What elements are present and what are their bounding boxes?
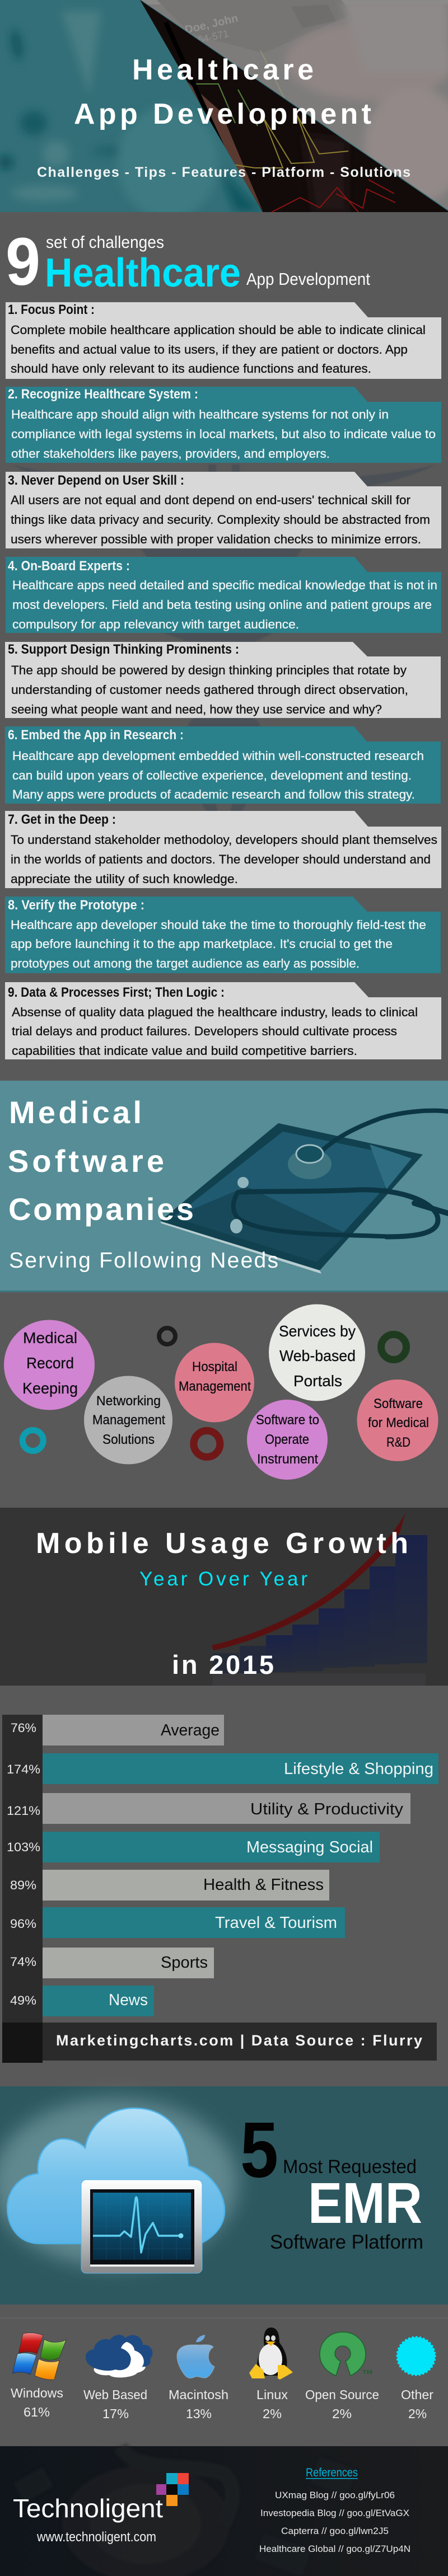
emr heading: Software Platform — [270, 2231, 423, 2253]
ring: black — [159, 1328, 175, 1344]
panel 4 body: compulsory for app relevancy with target audience. — [12, 617, 299, 631]
panel 7 body — [11, 833, 437, 886]
challenges section — [0, 212, 448, 1081]
bubble: software to operate instrument — [247, 1400, 328, 1480]
bar: travel and tourism — [10, 1907, 345, 1938]
monitor label text: 064-571 — [191, 28, 230, 47]
references list: Healthcare Global // goo.gl/Z7Up4N — [259, 2544, 410, 2554]
bubble: hospital management: Hospital — [192, 1359, 237, 1374]
hero title — [74, 54, 371, 130]
hero subtitle: Challenges - Tips - Features - Platform - Solutions — [37, 165, 410, 180]
heading: 9 set of challenges: 9 — [6, 223, 40, 299]
panel 9 body: capabilities that indicate value and build competitive barriers. — [12, 1044, 357, 1058]
platform: linux: 2% — [263, 2406, 282, 2421]
logo squares — [156, 2473, 189, 2506]
bar: sports: 74% — [10, 1955, 36, 1969]
panel 2 body: compliance with legal systems in local markets, but also to indicate value to — [11, 427, 436, 441]
bar chart image — [212, 1513, 427, 1686]
bubble: medical record keeping: Record — [26, 1354, 74, 1372]
technoligent logo — [13, 2473, 189, 2545]
panel 6: embed the app in research — [5, 726, 441, 804]
platform: other: 2% — [408, 2406, 427, 2421]
growth bar chart — [2, 1715, 438, 2063]
bar: lifestyle and shopping — [7, 1753, 438, 1784]
monitor label text — [185, 16, 238, 43]
banner heading: Medical — [9, 1095, 142, 1130]
bubble: software to operate instrument: Instrument — [257, 1452, 318, 1467]
bubble: networking management solutions: Solutions — [102, 1432, 155, 1447]
bar: utility and productivity: Utility & Productivity — [250, 1800, 404, 1818]
bar: lifestyle and shopping: Lifestyle & Shopping — [284, 1760, 433, 1778]
panel 1: focus point: 1. Focus Point : — [8, 302, 95, 317]
cloud glow — [0, 2099, 238, 2267]
panel 9 body: Absense of quality data plagued the healthcare industry, leads to clinical — [12, 1005, 418, 1019]
panel 5 body — [11, 663, 408, 716]
panel 3: never depend on user skill — [6, 472, 441, 548]
banner heading: Software — [8, 1143, 164, 1179]
mobile usage growth banner — [0, 1508, 448, 1686]
panel 5 body: understanding of customer needs gathered through direct observation, — [11, 683, 408, 697]
platform: windows: 61% — [24, 2405, 50, 2419]
panel 9 body — [12, 1005, 418, 1058]
footer stethoscope background — [13, 2447, 356, 2576]
platform: web based — [83, 2335, 152, 2421]
bar: travel and tourism: Travel & Tourism — [215, 1914, 337, 1932]
banner subheading: Year Over Year — [139, 1568, 307, 1590]
panel 2: recognize healthcare system — [6, 387, 441, 463]
bubble: medical record keeping — [4, 1320, 95, 1410]
icon: double cloud — [86, 2335, 152, 2377]
panel 8: verify the prototype — [5, 897, 441, 973]
bubble: software for medical r&d: Software — [374, 1396, 423, 1411]
bar: health and fitness: Health & Fitness — [203, 1876, 324, 1894]
bar: news — [10, 1986, 154, 2016]
bar: news: 49% — [10, 1993, 36, 2007]
panel 3: never depend on user skill: 3. Never Depend on User Skill : — [8, 473, 184, 488]
icon: penguin — [249, 2328, 293, 2380]
emr heading: EMR — [308, 2171, 422, 2235]
panel 4: on-board experts — [6, 557, 441, 633]
hero photo: monitor — [140, 0, 448, 212]
icon: open source keyhole — [320, 2332, 372, 2376]
bubble: services by web-based portals: Web-based — [279, 1347, 356, 1364]
icon: open source keyhole: TM — [362, 2369, 372, 2376]
panel 8: verify the prototype: 8. Verify the Prototype : — [8, 898, 144, 913]
ring: dark red — [194, 1430, 220, 1457]
bar: messaging social: Messaging Social — [246, 1838, 373, 1856]
heading: 9 set of challenges — [6, 223, 370, 299]
ring: teal — [22, 1430, 43, 1451]
panel 5 body: seeing what people want and need, how they use service and why? — [11, 702, 382, 716]
bar: messaging social: 103% — [7, 1840, 40, 1854]
cloud — [7, 2108, 225, 2244]
needs bubbles — [0, 1292, 448, 1508]
bar: news: News — [109, 1991, 148, 2009]
panel 5 body: The app should be powered by design thinking principles that rotate by — [11, 663, 407, 677]
heading: 9 set of challenges: set of challenges — [46, 232, 164, 252]
chart source bar — [2, 2023, 437, 2063]
panel 1 body: benefits and actual value to its users, if they are patient or doctors. App — [11, 342, 408, 356]
references list: UXmag Blog // goo.gl/fyLr06 — [275, 2490, 395, 2500]
panel 1: focus point — [6, 302, 441, 379]
panel 1 body: Complete mobile healthcare application should be able to indicate clinical — [11, 323, 426, 337]
bubble: hospital management: Management — [179, 1379, 251, 1394]
technoligent logo: www.technoligent.com — [36, 2530, 156, 2545]
bubble: services by web-based portals: Portals — [293, 1372, 342, 1390]
panel 7 body: in the worlds of patients and doctors. The developer should understand and — [11, 852, 431, 866]
platform: other — [398, 2337, 435, 2421]
panel 4 body: most developers. Field and beta testing using online and patient groups are — [12, 598, 432, 612]
hero title: Healthcare — [132, 54, 314, 86]
monitor label text: Doe, John — [184, 12, 239, 36]
references list — [259, 2490, 410, 2554]
platform: macintosh: 13% — [186, 2406, 212, 2421]
platform: macintosh: Macintosh — [169, 2387, 228, 2402]
tablet and stethoscope image — [160, 1110, 448, 1274]
bubble: services by web-based portals: Services by — [279, 1322, 356, 1340]
platform share section — [0, 2305, 448, 2446]
panel 1 body — [11, 323, 426, 376]
emr banner — [0, 2086, 448, 2305]
references list: Capterra // goo.gl/lwn2J5 — [281, 2526, 389, 2536]
panel 4: on-board experts: 4. On-Board Experts : — [8, 559, 130, 574]
platform: linux — [249, 2328, 293, 2421]
heartbeat line — [93, 2197, 181, 2253]
hero title: App Development — [74, 98, 371, 130]
icon: windows flag — [12, 2333, 66, 2380]
platform: open source: 2% — [332, 2406, 352, 2421]
rising bars — [213, 1535, 427, 1676]
bar: messaging social — [7, 1832, 380, 1862]
panel 7: get in the deep: 7. Get in the Deep : — [8, 812, 116, 827]
panel 9 body: trial delays and product failures. Developers should cultivate process — [12, 1024, 397, 1038]
panel 3 body: things like data privacy and security. Complexity should be abstracted from — [11, 513, 430, 527]
emr heading: Most Requested — [283, 2156, 417, 2178]
panel 6: embed the app in research: 6. Embed the App in Research : — [8, 728, 184, 743]
bar: sports: Sports — [161, 1954, 208, 1972]
emr heading — [240, 2105, 423, 2253]
platform: web based: Web Based — [83, 2387, 147, 2402]
banner heading: Companies — [8, 1191, 194, 1227]
footer — [0, 2446, 448, 2576]
references heading: References — [306, 2466, 358, 2479]
panel 6 body: Healthcare app development embedded within well-constructed research — [12, 749, 424, 763]
bar: utility and productivity — [7, 1793, 410, 1824]
platform: windows — [11, 2333, 66, 2419]
icon: scalloped circle — [398, 2337, 435, 2375]
panel 6 body — [12, 749, 424, 801]
chestpiece — [230, 1145, 332, 1233]
panel 3 body: All users are not equal and dont depend on end-users' technical skill for — [11, 493, 410, 507]
hero banner — [0, 0, 448, 218]
stethoscope — [234, 1110, 448, 1237]
monitor — [81, 2180, 202, 2273]
panel 3 body: users wherever possible with proper validation checks to minimize errors. — [11, 532, 421, 546]
banner heading: Mobile Usage Growth — [36, 1527, 408, 1560]
panel 4 body: Healthcare apps need detailed and specific medical knowledge that is not in — [12, 578, 437, 592]
caduceus watermark — [11, 464, 437, 823]
hero photo: teal panel — [0, 0, 448, 218]
panel 7 body: appreciate the utility of such knowledge. — [11, 872, 238, 886]
panel 5: support design thinking prominents: 5. Support Design Thinking Prominents : — [8, 642, 239, 657]
chart source bar: Marketingcharts.com | Data Source : Flurry — [56, 2032, 422, 2049]
panel 9: data and processes first — [5, 982, 441, 1059]
bar: utility and productivity: 121% — [7, 1804, 40, 1818]
platform: other: Other — [401, 2387, 433, 2402]
panel 2: recognize healthcare system: 2. Recognize Healthcare System : — [8, 387, 198, 402]
panel 8 body: prototypes out among the target audience as early as possible. — [11, 956, 360, 970]
section background — [0, 1292, 448, 1508]
panel 9: data and processes first: 9. Data & Processes First; Then Logic : — [8, 985, 225, 1000]
section background — [0, 212, 448, 1081]
growth arrow — [212, 1513, 405, 1650]
axis column — [2, 1715, 43, 2023]
technoligent logo: Technoligent — [13, 2494, 163, 2523]
panel 2 body: Healthcare app should align with healthcare systems for not only in — [11, 407, 389, 421]
panel 2 body: other stakeholders like payers, providers, and employers. — [11, 447, 330, 461]
bubble: networking management solutions — [84, 1376, 172, 1464]
panel 2 body — [11, 407, 436, 461]
platform: linux: Linux — [256, 2387, 288, 2402]
bubble: software for medical r&d — [357, 1380, 438, 1461]
panel 8 body: Healthcare app developer should take the time to thoroughly field-test the — [11, 918, 426, 932]
banner year: in 2015 — [172, 1650, 274, 1679]
bar: average — [11, 1715, 224, 1746]
bar: health and fitness: 89% — [10, 1878, 36, 1892]
bubble: software to operate instrument: Operate — [265, 1432, 309, 1447]
panel 6 body: Many apps were products of academic research and follow this strategy. — [12, 787, 415, 801]
bar reflection — [213, 1673, 426, 1686]
bubble: hospital management — [175, 1343, 254, 1423]
panel 1 body: should have only relevant to its audience functions and features. — [11, 362, 371, 376]
icon: apple — [177, 2335, 214, 2378]
panel 8 body — [11, 918, 426, 970]
banner subheading: Serving Following Needs — [9, 1249, 278, 1273]
bar: average: Average — [161, 1721, 220, 1739]
medical software banner — [0, 1081, 448, 1292]
bar: average: 76% — [11, 1721, 36, 1735]
hero photo: hand overlay: 82 — [410, 198, 430, 217]
panel 6 body: can build upon years of collective experience, development and testing. — [12, 768, 412, 782]
bubble: services by web-based portals — [269, 1304, 365, 1401]
bubble: software for medical r&d: for Medical — [368, 1415, 429, 1430]
platform: open source — [305, 2332, 379, 2421]
platform: web based: 17% — [102, 2406, 129, 2421]
emr heading: 5 — [240, 2105, 278, 2194]
references list: Investopedia Blog // goo.gl/EtVaGX — [260, 2508, 409, 2518]
references — [259, 2466, 410, 2554]
heading: 9 set of challenges: Healthcare — [45, 251, 241, 295]
bar: lifestyle and shopping: 174% — [7, 1762, 40, 1776]
bubble: medical record keeping: Keeping — [22, 1380, 78, 1397]
bubble: networking management solutions: Networking — [96, 1393, 161, 1409]
panel 8 body: app before launching it to the app marketplace. It's crucial to get the — [11, 937, 393, 951]
ring: green — [381, 1334, 407, 1360]
platform: windows: Windows — [11, 2386, 63, 2400]
panel 4 body — [12, 578, 437, 631]
platform: open source: Open Source — [305, 2387, 379, 2402]
bar: sports — [10, 1948, 214, 1978]
panel 7: get in the deep — [5, 811, 441, 888]
platform: macintosh — [169, 2335, 228, 2421]
cloud monitor icon — [7, 2108, 225, 2273]
bar: travel and tourism: 96% — [10, 1917, 36, 1931]
bubble: software for medical r&d: R&D — [386, 1435, 410, 1450]
bubble: software to operate instrument: Software to — [256, 1413, 319, 1428]
panel 5: support design thinking prominents — [5, 642, 441, 718]
panel 7 body: To understand stakeholder methodoloy, developers should plant themselves — [11, 833, 437, 847]
hero photo: hand overlay — [140, 0, 448, 217]
bar: health and fitness — [10, 1870, 329, 1901]
panel 3 body — [11, 493, 430, 546]
banner heading — [8, 1095, 194, 1227]
heading: 9 set of challenges: App Development — [246, 269, 370, 289]
bubble: networking management solutions: Management — [92, 1413, 165, 1428]
bubble: medical record keeping: Medical — [23, 1329, 77, 1346]
